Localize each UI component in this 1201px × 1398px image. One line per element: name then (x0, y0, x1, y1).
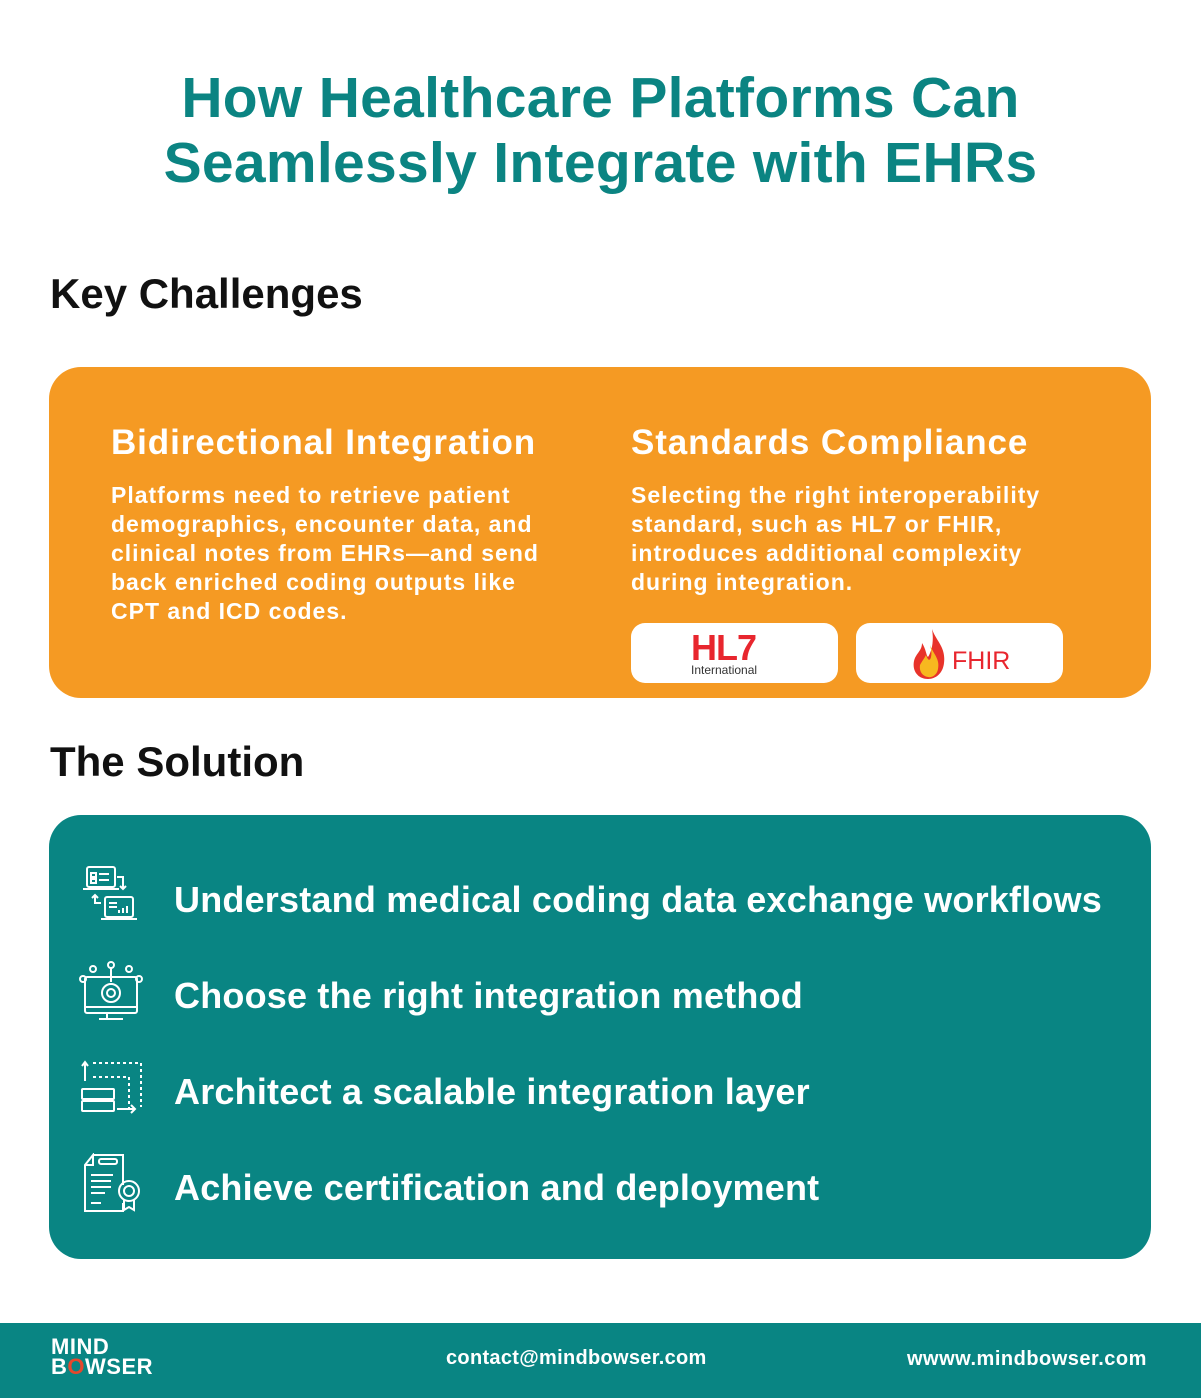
column: bidirectional integration (111, 423, 539, 624)
contact email: contact@mindbowser.com (446, 1347, 707, 1369)
panel: solution steps (49, 815, 1151, 1259)
column: bidirectional integration: CPT and ICD codes. (111, 598, 348, 624)
logo: mindbowser (51, 1334, 153, 1379)
logo: HL7: International (691, 663, 757, 677)
column: bidirectional integration: demographics, encounter data, and (111, 511, 533, 537)
step 2 (79, 961, 803, 1020)
logo: mindbowser: MIND (51, 1334, 109, 1359)
step 3: Architect a scalable integration layer (174, 1071, 810, 1112)
column: bidirectional integration: Platforms need to retrieve patient (111, 482, 511, 508)
logo: mindbowser: BOWSER (51, 1354, 153, 1379)
website: wwww.mindbowser.com (907, 1348, 1147, 1370)
heading: key challenges: Key Challenges (50, 270, 363, 317)
column: standards compliance: during integration. (631, 569, 853, 595)
logo: FHIR: FHIR (952, 647, 1010, 675)
column: standards compliance (631, 423, 1040, 595)
step 2: Choose the right integration method (174, 975, 803, 1016)
icon: gear monitor (79, 961, 143, 1020)
title (164, 66, 1037, 195)
column: bidirectional integration: Bidirectional Integration (111, 423, 536, 462)
step 3 (81, 1060, 810, 1114)
column: standards compliance: standard, such as HL7 or FHIR, (631, 511, 1002, 537)
logo: FHIR (856, 623, 1063, 683)
icon: scalable layer (81, 1060, 142, 1114)
column: standards compliance: introduces additional complexity (631, 540, 1022, 566)
step 1 (83, 866, 1102, 920)
footer (0, 1323, 1201, 1398)
title: How Healthcare Platforms Can (181, 66, 1020, 130)
panel: challenges (49, 367, 1151, 698)
step 4: Achieve certification and deployment (174, 1167, 819, 1208)
logo: HL7 (631, 623, 838, 683)
column: bidirectional integration: back enriched coding outputs like (111, 569, 516, 595)
column: standards compliance: Selecting the right interoperability (631, 482, 1040, 508)
column: bidirectional integration: clinical notes from EHRs—and send (111, 540, 539, 566)
step 4 (84, 1153, 819, 1212)
heading: the solution: The Solution (50, 738, 304, 785)
logo: HL7: HL7 (691, 627, 756, 668)
column: standards compliance: Standards Compliance (631, 423, 1028, 462)
step 1: Understand medical coding data exchange workflows (174, 879, 1102, 920)
icon: certificate (84, 1153, 140, 1212)
title: Seamlessly Integrate with EHRs (164, 131, 1037, 195)
icon: data exchange (83, 866, 137, 920)
